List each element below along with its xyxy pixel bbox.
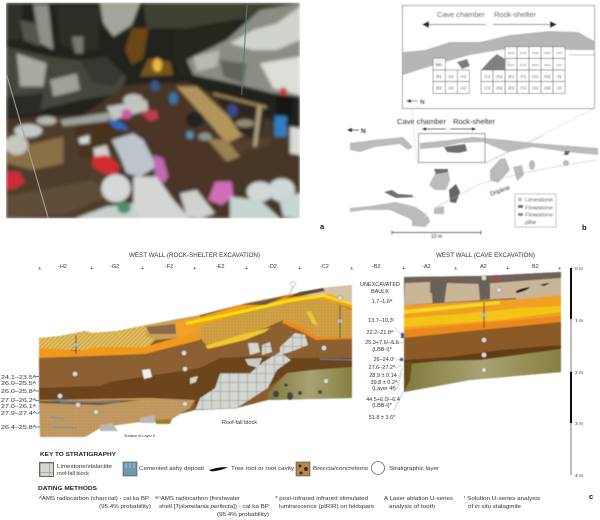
layer 2 hatched [39, 325, 160, 350]
method: laser ablation: analysis of tooth [389, 504, 435, 510]
method: laser ablation: A Laser ablation U-series [384, 496, 453, 502]
grid labels: -C1 [483, 74, 491, 79]
key to stratigraphy [40, 452, 439, 477]
depth scale [570, 266, 583, 479]
date labels, centre: 25.3+7.6/–5.6 [365, 340, 399, 346]
method: AMS charcoal: ᴬAMS radiocarbon (charcoal) - cal ka BP [38, 494, 149, 502]
legend: Flowstone [525, 206, 553, 212]
date labels, centre: 51.8 ± 3.6* [369, 415, 396, 421]
date labels, left: 24.1–23.5ᴬ [1, 373, 37, 381]
grid labels: BB1 [436, 63, 442, 67]
method: AMS shell: shell [ Tylomelania perfecta ]) - cal ka BP [159, 504, 269, 510]
panel letters: a [320, 222, 325, 231]
date labels, left: 26.0–25.5ᴬ [1, 379, 37, 387]
scale bar 10 m [392, 230, 481, 240]
grid labels: -A1 [459, 74, 467, 79]
grid labels: -I1/1 [556, 63, 562, 67]
grid labels: -E1 [507, 74, 515, 79]
panel c: section headings and grid labels: + [454, 266, 457, 272]
grid labels: -D2 [495, 86, 503, 90]
date labels, centre: (Layer 4f) [372, 386, 396, 392]
dating methods [38, 486, 540, 518]
method: solution U-series [464, 495, 540, 510]
date labels, left [1, 373, 257, 438]
full cave plan: Rock-shelter [453, 119, 496, 126]
panel c: section headings and grid labels: + [506, 266, 509, 272]
panel c: section headings and grid labels: + [141, 266, 144, 272]
date labels, centre: 26–24.0ᵗ [373, 356, 395, 363]
key: breccia [296, 462, 368, 476]
grid labels: -E1/1 [507, 63, 515, 67]
panel letters: c [589, 492, 593, 501]
legend: Limestone [525, 198, 553, 204]
depth scale: 2 m [575, 370, 583, 376]
key: limestone [40, 462, 112, 477]
grid labels: -G1 [531, 74, 539, 79]
legend: Flowstone [525, 212, 553, 218]
panel c: section headings and grid labels: + [245, 266, 248, 272]
date labels, centre: 22.2–21.8ᴬ [367, 328, 394, 336]
panel c: section headings and grid labels: WEST WALL (ROCK-SHELTER EXCAVATION) [129, 253, 260, 259]
date labels, centre: 39.8 ± 0.2ᴬ [371, 378, 398, 386]
lower brown layers [39, 323, 352, 388]
grid labels [436, 51, 562, 90]
depth scale: 4 m [575, 473, 583, 479]
grid labels: A2 [448, 86, 454, 90]
grid labels: -H1/2 [543, 51, 551, 55]
method: AMS shell: (95.4% probability) [217, 512, 269, 518]
photo: cave excavation (panel a) [5, 3, 300, 218]
roof-fall block [195, 352, 291, 410]
grid labels: -E1/2 [507, 51, 515, 55]
grid labels: B2 [436, 86, 442, 90]
key: stratigraphic layer: Stratigraphic layer [389, 466, 439, 472]
date labels, centre: (LBB-I)* [372, 403, 393, 409]
grid labels: -C2 [483, 86, 491, 90]
date labels, centre: 44.5+6.0/–6.4 [366, 397, 400, 403]
panel c: section headings and grid labels: + [90, 266, 93, 272]
panel c: section headings and grid labels: B2 [532, 264, 539, 270]
grid labels: -E2 [507, 86, 515, 90]
method: pIRIR: luminescence (pIRIR) on feldspars [279, 504, 374, 510]
panel c: section headings and grid labels: WEST WALL (CAVE EXCAVATION) [436, 253, 535, 259]
panel c: section headings and grid labels: -G2 [110, 264, 119, 270]
panel c: section headings and grid labels: + [350, 266, 353, 272]
method: solution U-series: of in situ stalagmite [468, 504, 521, 510]
grid labels: -F1/1 [519, 63, 527, 67]
full cave plan: Cave chamber [397, 119, 447, 126]
key: cemented ash [123, 462, 205, 476]
key: breccia: Breccia/concretions [313, 466, 368, 472]
yellow sandy layer [200, 297, 352, 346]
date labels, centre: 27.6–27.2ᴬ [369, 363, 396, 371]
grid labels: -F1/2 [519, 51, 527, 55]
grid labels: -A2 [459, 86, 467, 90]
panel c: section headings and grid labels: -H2 [58, 264, 67, 270]
zoom dashed lines [402, 5, 595, 165]
method: solution U-series: ᵗ Solution U-series analysis [464, 495, 540, 502]
key: tree root [209, 466, 294, 472]
panel c: section headings and grid labels: + [38, 266, 41, 272]
key to stratigraphy: KEY TO STRATIGRAPHY [40, 452, 116, 458]
key: limestone: roof-fall block [57, 471, 89, 477]
full cave plan: N [361, 128, 366, 135]
grid labels: A1 [448, 74, 454, 79]
grid labels: -G1/1 [531, 63, 539, 67]
full cave plan [347, 119, 598, 240]
method: pIRIR [275, 496, 374, 510]
inset plan box [402, 6, 594, 108]
date labels, centre: 13.7–10.3ᵗ [368, 317, 395, 324]
date labels, left: Surface of Layer 5 [124, 434, 155, 438]
date labels, left: 26.0–25.8ᴬ [1, 387, 37, 395]
grid labels: -I1 [556, 74, 562, 79]
method: AMS charcoal: (95.4% probability) [99, 504, 151, 510]
inset direction labels [406, 12, 557, 106]
legend: pillar [525, 220, 537, 226]
date labels, centre: UNEXCAVATED [360, 282, 400, 288]
breccia block [268, 367, 352, 400]
method: AMS shell: ᵃᵐAMS radiocarbon (freshwater [155, 496, 240, 502]
full cave plan: Dripline [490, 185, 511, 198]
panel c: section headings and grid labels: + [558, 266, 561, 272]
method: laser ablation [384, 496, 453, 510]
method: AMS shell [155, 496, 269, 518]
date labels, centre: 28.9 ± 0.14 [369, 373, 397, 379]
date labels, left: 27.9–27.4ᴬ [1, 409, 37, 417]
grid labels: -D1 [495, 74, 503, 79]
key: stratigraphic layer [372, 462, 439, 474]
orange band [39, 330, 200, 358]
panel c: section headings and grid labels [38, 253, 561, 272]
inset direction labels: Rock-shelter [494, 12, 537, 19]
grid labels: -G1/2 [531, 51, 539, 55]
date labels, centre: BAULK [371, 289, 389, 295]
depth scale: 3 m [575, 421, 583, 427]
panel c: section headings and grid labels: -B2 [372, 264, 381, 270]
date labels, left: 27.0–26.2ᴬ [1, 396, 37, 404]
grid labels: -H1/1 [543, 63, 551, 67]
date labels, centre [360, 282, 400, 421]
key: cemented ash: Cemented ashy deposit [139, 466, 205, 472]
grid labels: -H2 [543, 86, 551, 90]
stratigraphic layer markers [58, 296, 342, 414]
grid labels: -I2 [556, 86, 562, 90]
date labels, centre: (LBB-I)* [372, 347, 393, 353]
panel c: section headings and grid labels: -F2 [165, 264, 173, 270]
key: tree root: Tree root or root cavity [231, 466, 294, 472]
grid labels: B1 [436, 74, 442, 79]
stratigraphic section: rock-shelter west wall [39, 282, 352, 437]
panel c: section headings and grid labels: -C2 [320, 264, 329, 270]
grid labels: -F1 [520, 74, 527, 79]
tan upper layers [145, 315, 200, 340]
grid labels: -G2 [531, 86, 539, 90]
grid labels: -F2 [520, 86, 527, 90]
panel c: section headings and grid labels: -A2 [422, 264, 431, 270]
grid labels: -H1 [543, 74, 551, 79]
panel b: cave plan [347, 5, 598, 240]
panel letters [320, 222, 593, 501]
date labels, left: 26.4–25.8ᴬ [1, 423, 37, 431]
excavation grid [433, 46, 565, 94]
date labels, centre: 1.7–1.6ᴬ [372, 297, 393, 305]
key: limestone: Limestone/stalactite [57, 464, 112, 470]
dating methods: DATING METHODS [38, 486, 97, 492]
depth scale: 0 m [575, 266, 583, 272]
inset direction labels: N [420, 99, 425, 106]
inset direction labels: Cave chamber [437, 12, 486, 19]
date labels, left: Roof-fall block [222, 420, 257, 426]
stratigraphic section: cave west wall [390, 272, 561, 410]
panel c: section headings and grid labels: -E2 [216, 264, 225, 270]
method: pIRIR: * post-infrared infrared stimulated [275, 496, 368, 502]
panel c: section headings and grid labels: A2 [480, 264, 487, 270]
panel c: section headings and grid labels: + [298, 266, 301, 272]
depth scale: 1 m [575, 318, 583, 324]
grid labels: -I1/2 [556, 51, 562, 55]
scale bar 10 m: 10 m [431, 234, 442, 240]
date labels, left: 27.0–26.1ᴬ [1, 402, 37, 410]
legend [515, 194, 556, 227]
panel letters: b [582, 223, 587, 232]
cemented ash lenses [48, 359, 352, 428]
panel c: section headings and grid labels: + [402, 266, 405, 272]
panel c: section headings and grid labels: -D2 [268, 264, 277, 270]
panel c: section headings and grid labels: + [193, 266, 196, 272]
method: AMS charcoal [38, 494, 151, 510]
